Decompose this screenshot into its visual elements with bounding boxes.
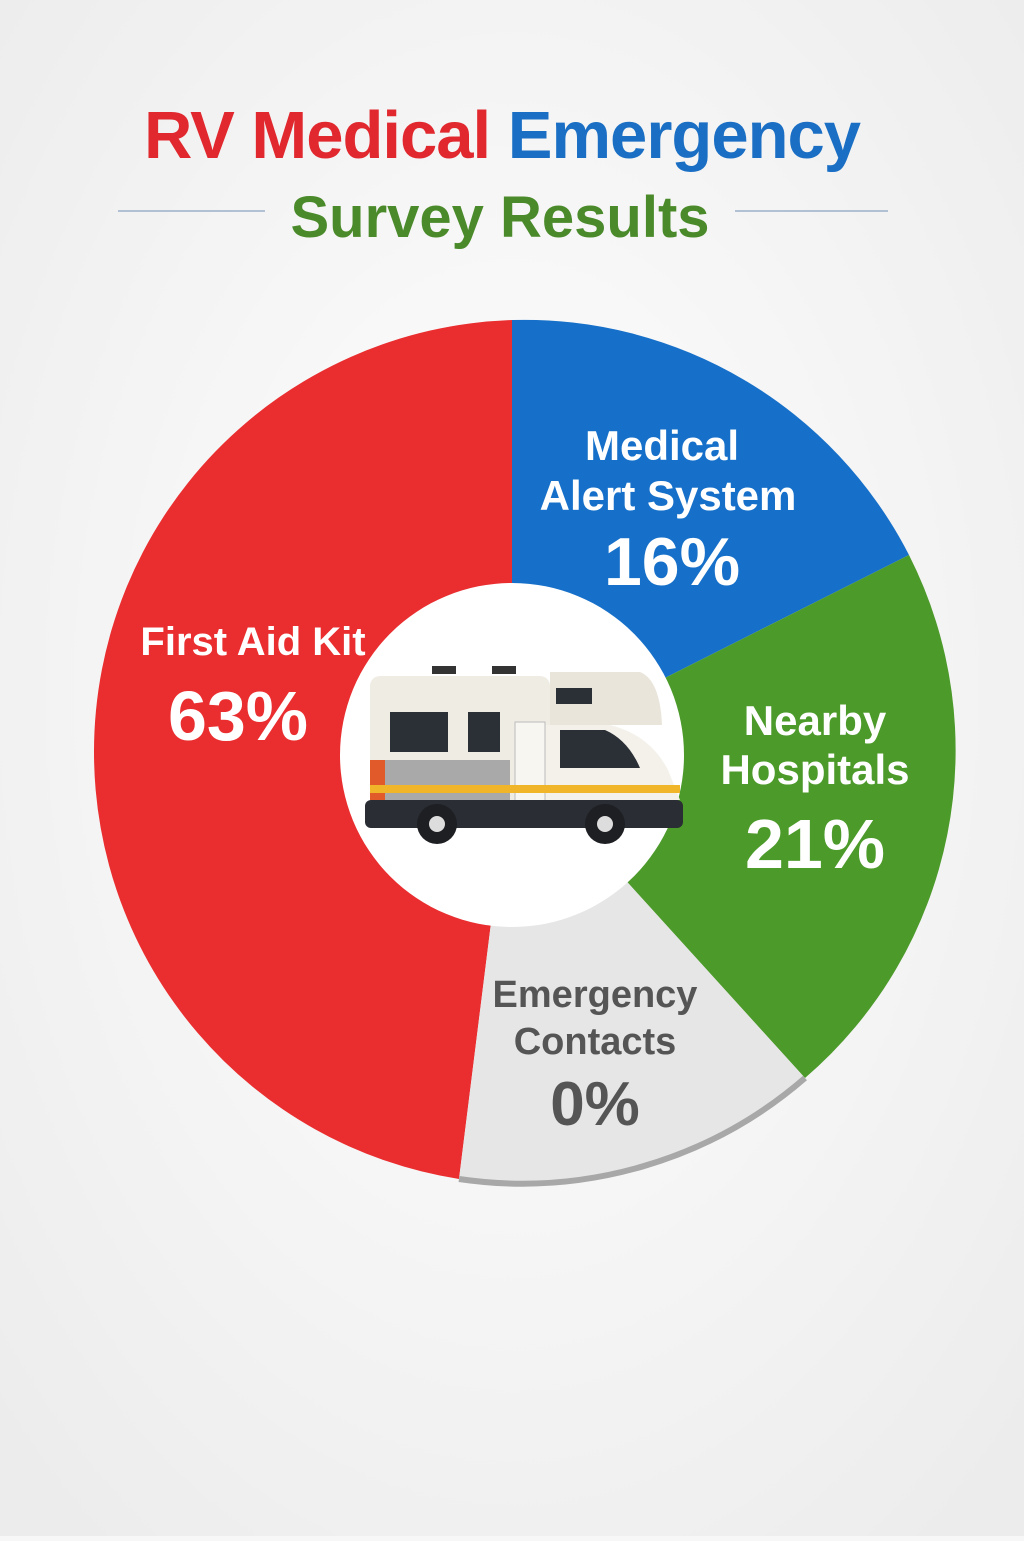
label: medical alert system: Alert System [540, 472, 796, 519]
label: first aid kit [140, 620, 366, 755]
label: emergency contacts [493, 974, 697, 1139]
title [118, 98, 888, 250]
label: medical alert system [540, 422, 796, 600]
label: emergency contacts: 0% [550, 1070, 640, 1139]
slice: emergency contacts [459, 755, 805, 1184]
slice: medical alert system [512, 320, 909, 755]
pie chart [94, 320, 956, 1184]
icon: RV [365, 666, 683, 844]
label: nearby hospitals: 21% [745, 805, 885, 883]
slice: nearby hospitals [512, 555, 956, 1078]
label: medical alert system: 16% [604, 524, 740, 600]
label: nearby hospitals [720, 697, 910, 883]
title: RV Medical Emergency [144, 98, 861, 173]
label: medical alert system: Medical [585, 422, 739, 469]
label: nearby hospitals: Nearby [744, 697, 887, 744]
label: first aid kit: 63% [168, 677, 308, 755]
label: emergency contacts: Emergency [493, 974, 697, 1016]
slice: first aid kit [94, 320, 512, 1179]
label: emergency contacts: Contacts [514, 1021, 676, 1063]
title: Survey Results [290, 185, 710, 250]
label: nearby hospitals: Hospitals [720, 746, 910, 793]
label: first aid kit: First Aid Kit [140, 620, 366, 664]
center circle [340, 583, 684, 927]
